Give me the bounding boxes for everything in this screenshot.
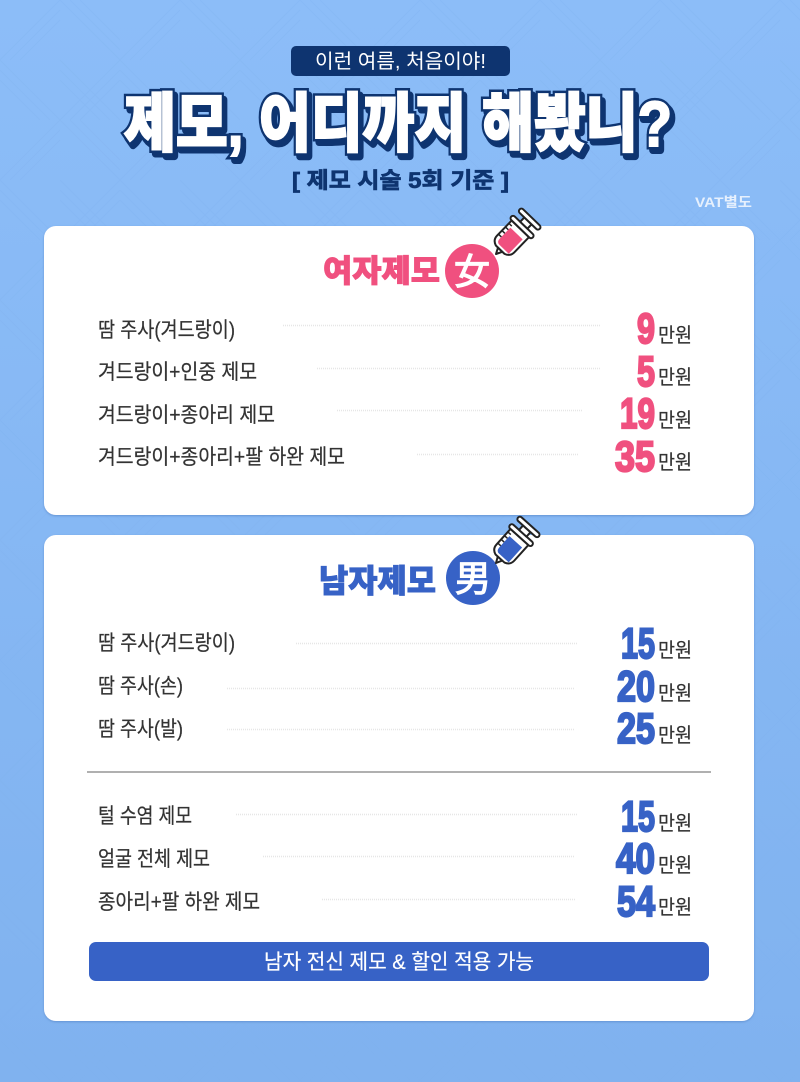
icon: men badge: 男 bbox=[455, 558, 491, 599]
row: armpit sweat injection: 땀 주사(겨드랑이) bbox=[98, 319, 235, 342]
icon: blue syringe bbox=[485, 515, 541, 573]
icon: women badge bbox=[445, 244, 499, 298]
row: beard removal: 만원 bbox=[658, 812, 692, 835]
heading: women: 여자제모 bbox=[323, 254, 440, 289]
row: armpit + calf + forearm: 만원 bbox=[658, 451, 692, 474]
tagline pill: 이런 여름, 처음이야! bbox=[315, 50, 486, 73]
row: armpit + calf: 19 bbox=[620, 390, 655, 438]
row: calf + forearm removal: 종아리+팔 하완 제모 bbox=[98, 891, 260, 914]
subtitle: [ 제모 시술 5회 기준 ] bbox=[292, 168, 509, 193]
row: calf + forearm removal: 만원 bbox=[658, 896, 692, 919]
banner: full body discount: 남자 전신 제모 & 할인 적용 가능 bbox=[264, 951, 534, 974]
row: foot sweat injection bbox=[98, 705, 692, 753]
icon: women badge: 女 bbox=[454, 251, 490, 292]
title: 제모, 어디까지 해봤니? bbox=[124, 88, 672, 160]
row: full face removal: 얼굴 전체 제모 bbox=[98, 848, 210, 871]
VAT note: VAT별도 bbox=[695, 194, 752, 210]
row: armpit + calf + forearm: 겨드랑이+종아리+팔 하완 제모 bbox=[98, 446, 345, 469]
icon: pink syringe bbox=[485, 207, 542, 264]
row: armpit + calf: 만원 bbox=[658, 409, 692, 432]
row: foot sweat injection: 25 bbox=[617, 705, 655, 753]
row: armpit sweat injection: 9 bbox=[637, 305, 655, 353]
row: beard removal bbox=[98, 793, 692, 841]
row: beard removal: 15 bbox=[621, 793, 655, 841]
row: hand sweat injection bbox=[98, 663, 692, 711]
row: armpit + calf bbox=[98, 390, 692, 438]
row: calf + forearm removal: 54 bbox=[617, 878, 655, 926]
row: calf + forearm removal bbox=[98, 878, 692, 926]
row: armpit + philtrum: 만원 bbox=[658, 366, 692, 389]
row: armpit + calf + forearm: 35 bbox=[615, 433, 655, 481]
row: armpit + philtrum: 겨드랑이+인중 제모 bbox=[98, 361, 257, 384]
row: hand sweat injection: 땀 주사(손) bbox=[98, 675, 183, 698]
panel: women's hair removal bbox=[44, 207, 754, 515]
row: armpit + calf: 겨드랑이+종아리 제모 bbox=[98, 404, 275, 427]
row: beard removal: 털 수염 제모 bbox=[98, 805, 192, 828]
row: hand sweat injection: 20 bbox=[617, 663, 655, 711]
tagline pill bbox=[291, 46, 510, 76]
row: armpit sweat injection bbox=[98, 620, 692, 668]
row: armpit sweat injection: 만원 bbox=[658, 639, 692, 662]
row: armpit + calf + forearm bbox=[98, 433, 692, 481]
heading: men: 남자제모 bbox=[319, 563, 436, 599]
row: foot sweat injection: 땀 주사(발) bbox=[98, 718, 183, 741]
row: hand sweat injection: 만원 bbox=[658, 682, 692, 705]
title: 제모, 어디까지 해봤니? bbox=[127, 92, 675, 164]
row: armpit sweat injection: 땀 주사(겨드랑이) bbox=[98, 632, 235, 655]
row: full face removal: 40 bbox=[616, 835, 655, 883]
row: armpit sweat injection: 15 bbox=[621, 620, 655, 668]
row: foot sweat injection: 만원 bbox=[658, 724, 692, 747]
row: full face removal bbox=[98, 835, 692, 883]
banner: full body discount bbox=[89, 942, 709, 981]
row: armpit + philtrum: 5 bbox=[637, 348, 655, 396]
icon: men badge bbox=[446, 551, 500, 605]
row: armpit sweat injection: 만원 bbox=[658, 324, 692, 347]
row: armpit sweat injection bbox=[98, 305, 692, 353]
row: full face removal: 만원 bbox=[658, 854, 692, 877]
title: 제모, 어디까지 해봤니? bbox=[124, 88, 672, 160]
row: armpit + philtrum bbox=[98, 348, 692, 396]
panel: men's hair removal bbox=[44, 515, 754, 1021]
